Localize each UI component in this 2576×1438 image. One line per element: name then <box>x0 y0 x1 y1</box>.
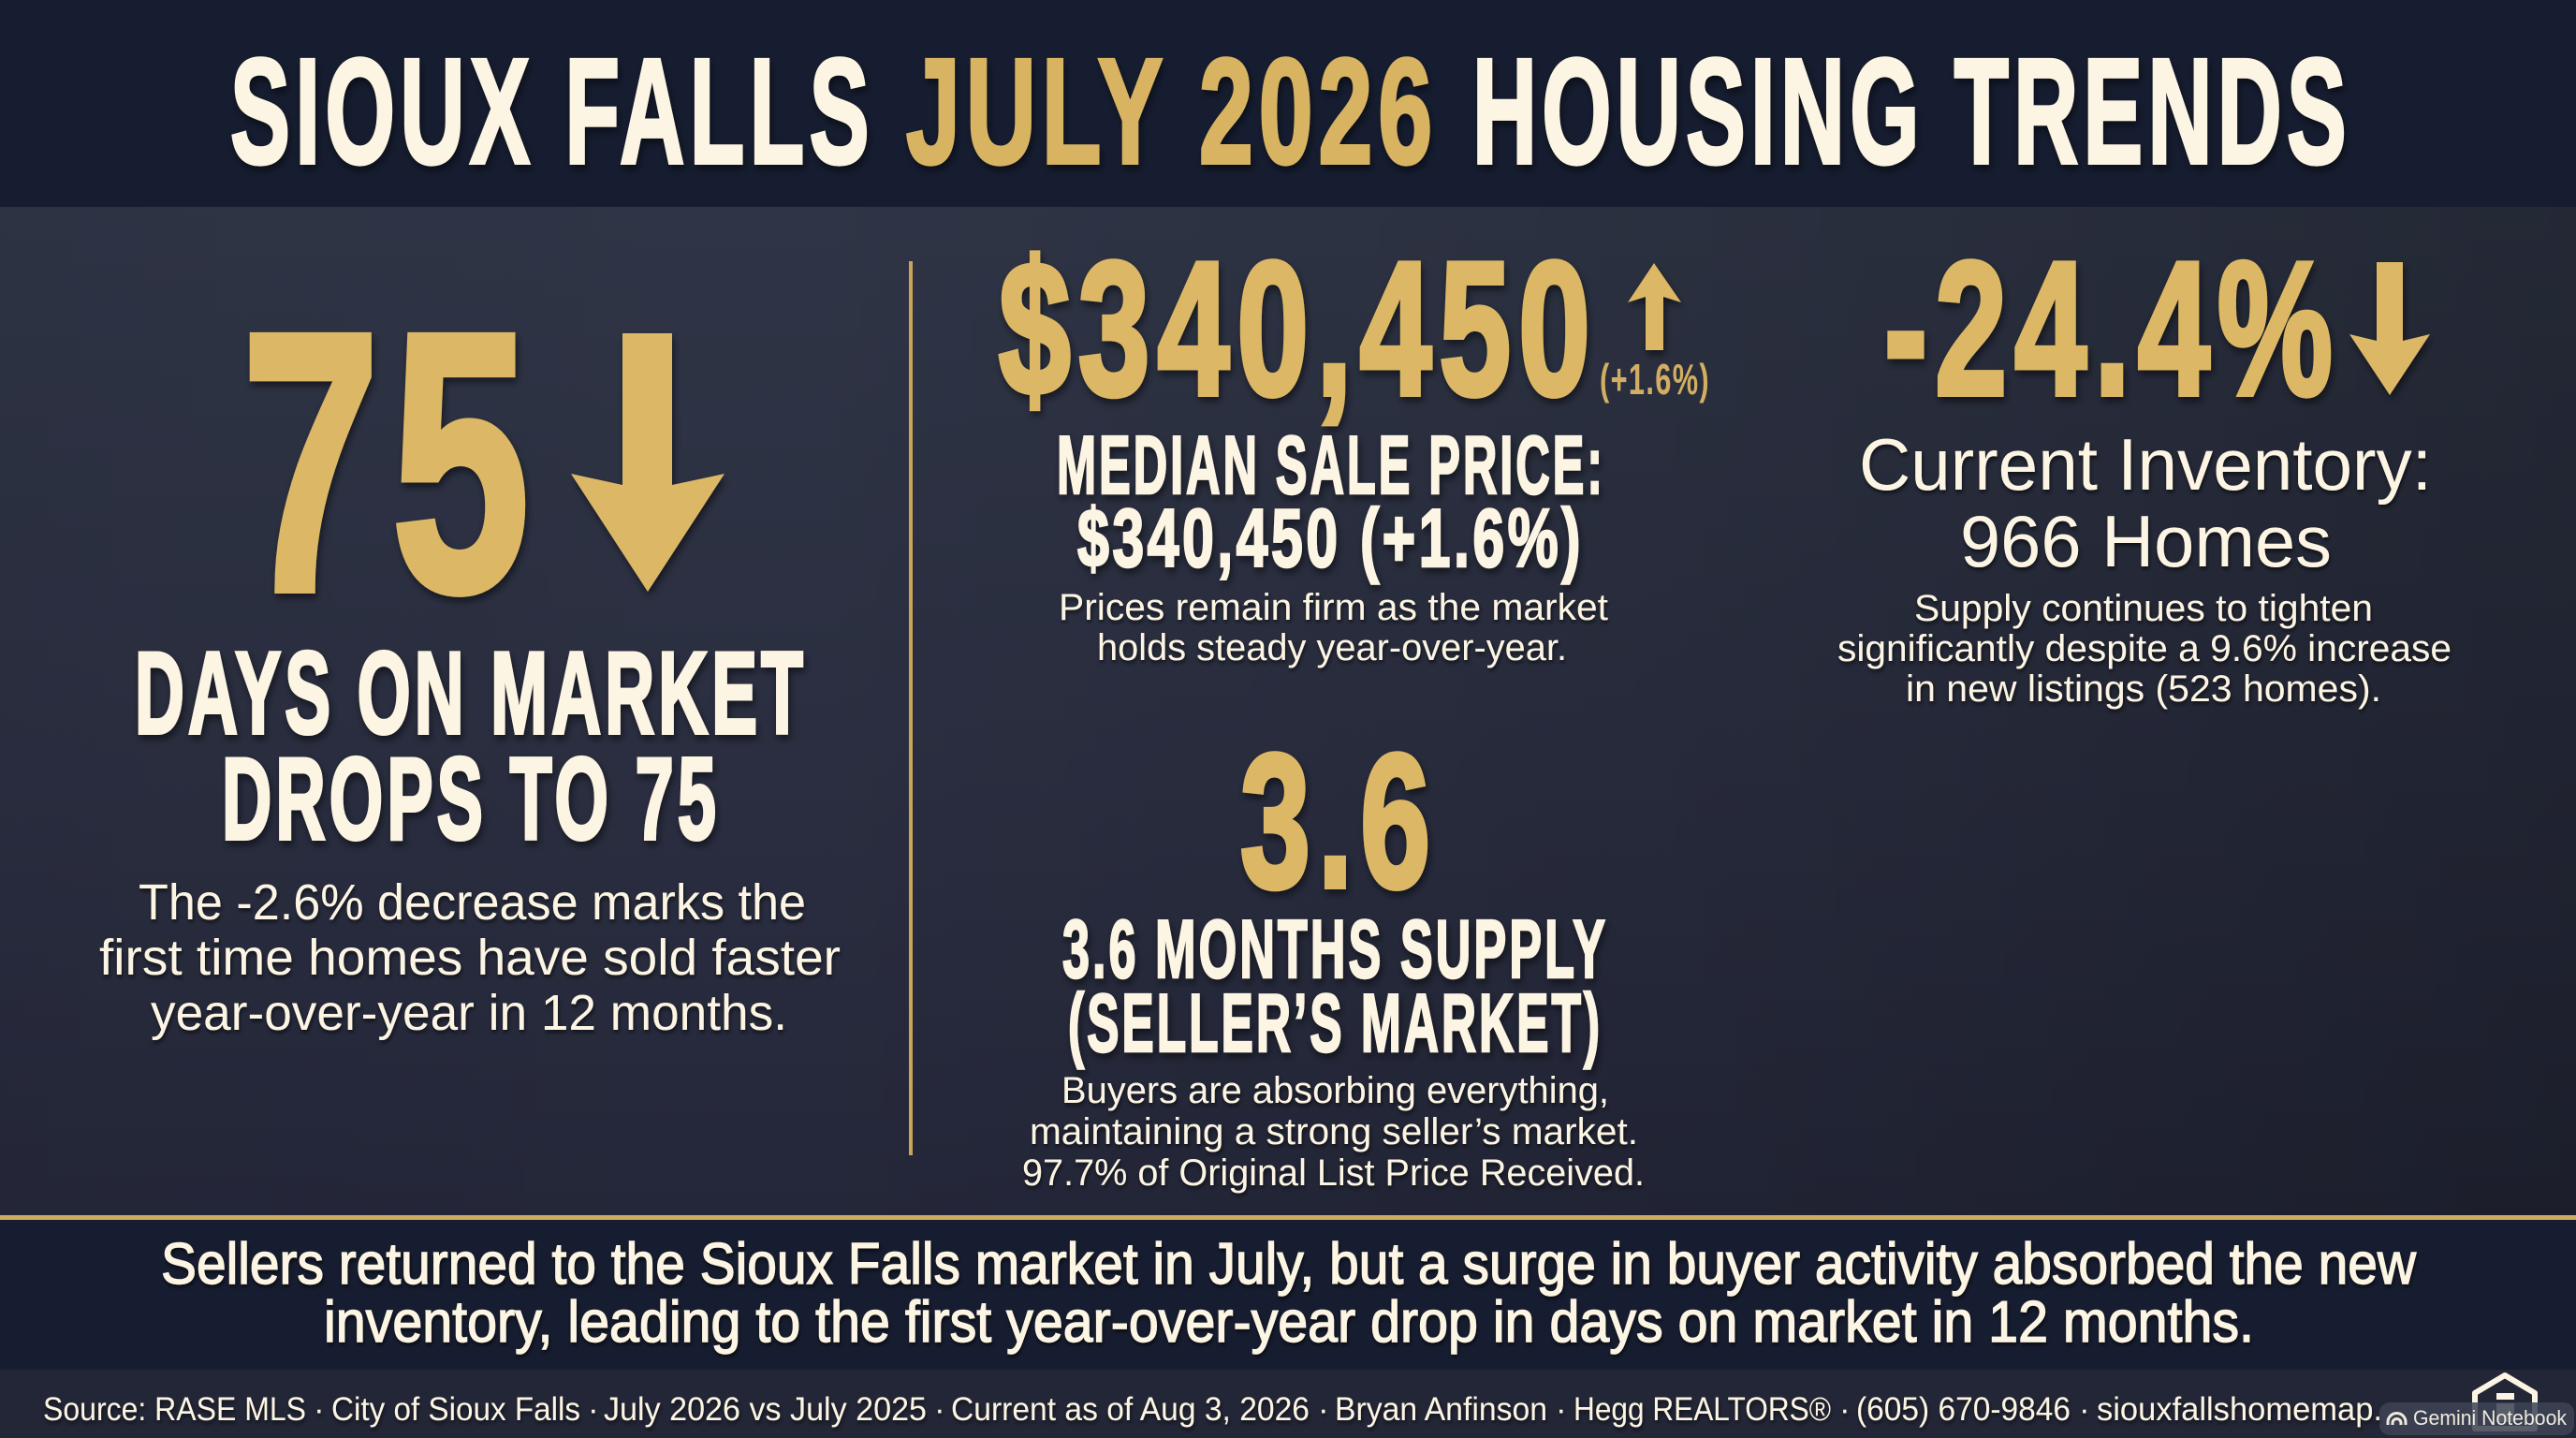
footer band <box>0 1370 2576 1438</box>
title: SIOUX FALLS <box>230 27 874 195</box>
heading: months supply: (SELLER’S MARKET) <box>1068 976 1603 1069</box>
big number 3.6: 3.6 <box>1240 715 1438 928</box>
source line: City of Sioux Falls <box>331 1391 580 1428</box>
icon: up arrow <box>1628 263 1681 350</box>
heading: median sale price <box>1057 418 1605 584</box>
description: holds steady year-over-year. <box>1097 627 1567 668</box>
summary text: inventory, leading to the first year-over-year drop in days on market in 12 months. <box>324 1290 2254 1355</box>
source line: · <box>1318 1391 1329 1428</box>
description: year-over-year in 12 months. <box>151 985 787 1041</box>
heading: current inventory: Current Inventory: <box>1859 423 2432 506</box>
description: significantly despite a 9.6% increase <box>1837 628 2452 669</box>
heading: months supply <box>1062 902 1608 1069</box>
source line: siouxfallshomemap. <box>2097 1391 2382 1428</box>
heading: median sale price: $340,450 (+1.6%) <box>1077 492 1584 584</box>
big number -24.4%: -24.4% <box>1884 223 2340 435</box>
description <box>1837 588 2452 710</box>
title <box>230 27 2351 195</box>
source line: Current as of Aug 3, 2026 <box>951 1391 1310 1428</box>
summary band <box>0 1215 2576 1370</box>
source line: · <box>934 1391 945 1428</box>
panel: median sale price <box>999 223 1710 668</box>
source line: · <box>2079 1391 2090 1428</box>
description: The -2.6% decrease marks the <box>139 874 806 931</box>
description: Buyers are absorbing everything, <box>1061 1070 1609 1111</box>
heading: days on market drops to 75: DAYS ON MARKET <box>135 629 807 758</box>
source line: · <box>588 1391 599 1428</box>
big number 75: 75 <box>242 257 541 668</box>
description <box>99 874 841 1041</box>
description: 97.7% of Original List Price Received. <box>1022 1152 1645 1194</box>
vertical gold divider <box>909 261 913 1155</box>
big number price: $340,450 <box>999 223 1598 435</box>
title: JULY 2026 <box>906 27 1438 195</box>
source line: (605) 670-9846 <box>1856 1391 2071 1428</box>
icon: down arrow <box>571 333 724 592</box>
change label: (+1.6%) <box>1600 355 1710 404</box>
source line: · <box>314 1391 325 1428</box>
description: in new listings (523 homes). <box>1906 668 2381 710</box>
source line: Bryan Anfinson <box>1335 1391 1547 1428</box>
description <box>1022 1070 1645 1194</box>
panel: days on market <box>99 257 841 1041</box>
source line <box>43 1391 2382 1428</box>
watermark badge <box>2379 1402 2574 1435</box>
heading: months supply: 3.6 MONTHS SUPPLY <box>1062 902 1608 995</box>
source line: · <box>1839 1391 1851 1428</box>
panel: months supply <box>1022 715 1645 1194</box>
header band <box>0 0 2576 207</box>
description: Prices remain firm as the market <box>1059 587 1608 628</box>
source line: Source: RASE MLS <box>43 1391 306 1428</box>
source line: Hegg REALTORS® <box>1573 1391 1831 1428</box>
description: maintaining a strong seller’s market. <box>1030 1111 1638 1152</box>
heading: median sale price: MEDIAN SALE PRICE: <box>1057 418 1605 511</box>
source line: · <box>1556 1391 1567 1428</box>
heading: current inventory <box>1859 423 2432 582</box>
description: first time homes have sold faster <box>99 930 841 986</box>
icon: equal housing house <box>2475 1375 2535 1429</box>
summary text: Sellers returned to the Sioux Falls market in July, but a surge in buyer activity absorbed the new <box>161 1232 2416 1297</box>
description <box>1059 587 1608 668</box>
summary text <box>161 1232 2416 1355</box>
icon: down arrow <box>2349 262 2430 395</box>
source line: July 2026 vs July 2025 <box>604 1391 927 1428</box>
heading: days on market drops to 75 <box>135 629 807 864</box>
description: Supply continues to tighten <box>1914 588 2373 629</box>
heading: current inventory: 966 Homes <box>1960 500 2332 582</box>
heading: days on market drops to 75: DROPS TO 75 <box>222 735 720 864</box>
panel: current inventory <box>1837 223 2452 710</box>
watermark badge: Gemini Notebook <box>2413 1406 2568 1430</box>
main background panel <box>0 207 2576 1218</box>
